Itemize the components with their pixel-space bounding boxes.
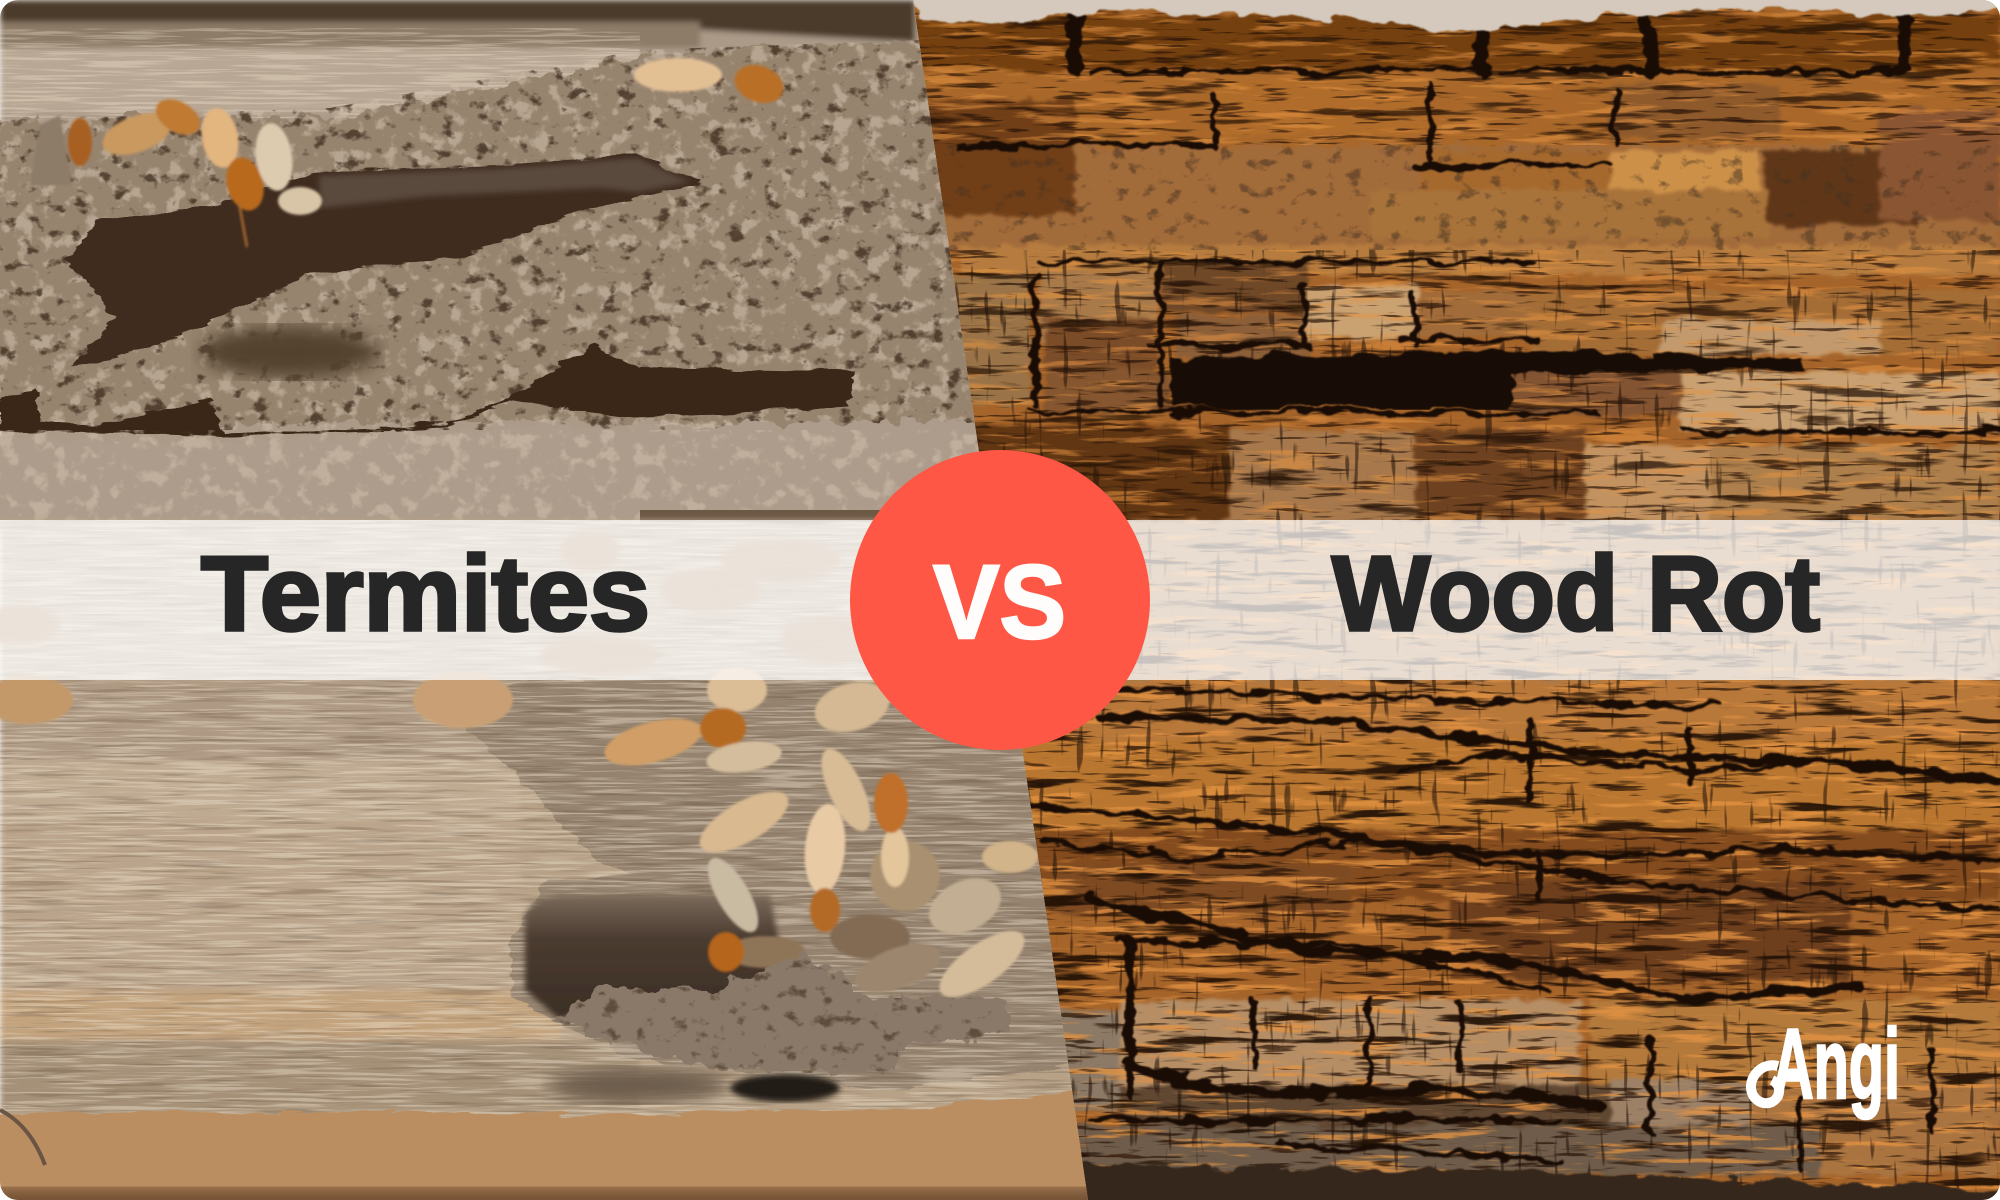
panel: wood rot photo: [900, 0, 2000, 1200]
band underlay: [960, 520, 2000, 680]
dark cavity: upper: [64, 155, 701, 368]
lower rot: [1000, 680, 2000, 740]
termites hidden behind band: [0, 530, 880, 675]
heading: Termites: Termites: [201, 535, 650, 653]
termites: lower group: [0, 668, 1038, 1009]
termites: upper group: [30, 58, 789, 247]
logo: Angi: Angi: [1772, 1008, 1900, 1119]
dark cavity: lower: [0, 345, 855, 438]
row above band: [960, 425, 1230, 520]
crust texture: [0, 40, 1000, 440]
bark and bottom shadow: [913, 0, 2000, 1200]
lower termite wood: [0, 520, 1100, 1120]
banner: translucent white band: [0, 520, 2000, 680]
grey exposed wood: [456, 680, 1100, 1090]
upper termite wood: [0, 0, 979, 451]
vs badge: VS: [933, 544, 1066, 661]
debris pile: [540, 950, 1020, 1103]
logo: Angi: [1751, 1008, 1900, 1119]
plank grain top: [0, 28, 640, 118]
dark hole: [525, 895, 790, 1020]
middle blocks: [950, 275, 1030, 405]
heading: Wood Rot: Wood Rot: [1332, 535, 1820, 653]
upper rot rows: [900, 15, 2000, 75]
lower plank: [0, 420, 985, 530]
panel: termites photo: [0, 0, 1110, 1200]
plank grain: [0, 520, 1100, 1120]
wood grain texture: [900, 0, 2000, 145]
bottom tan board: [0, 1090, 1100, 1200]
crust mass: [0, 40, 985, 425]
vs badge: [850, 450, 1150, 750]
black cavity: [1170, 350, 1810, 408]
wood cracks: [960, 0, 2000, 1170]
